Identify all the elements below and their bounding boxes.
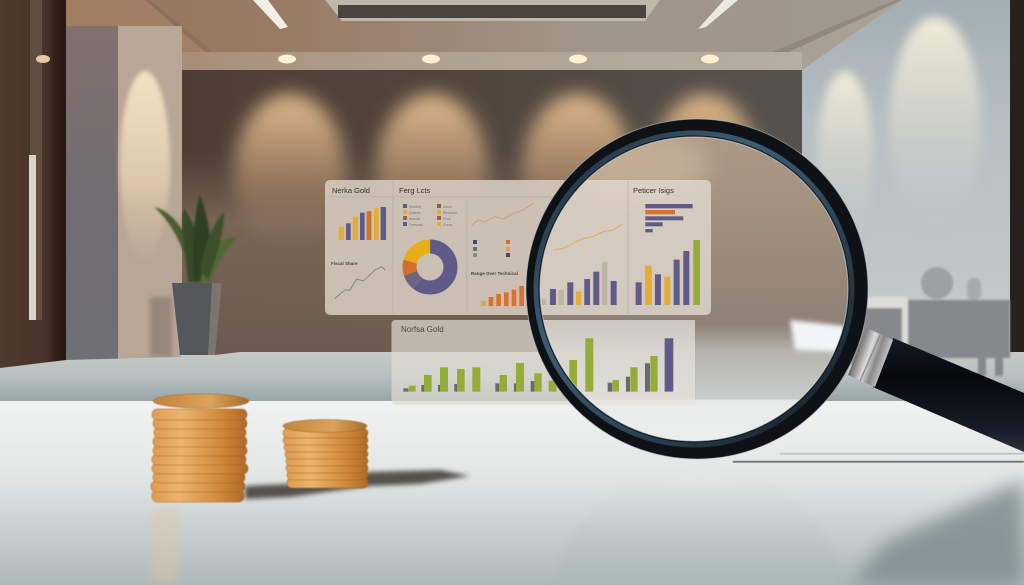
lens heading: Peticer Isigs (633, 186, 674, 195)
donut legend (403, 204, 457, 227)
donut chart (410, 246, 450, 288)
panel headings (332, 186, 674, 195)
donut legend: Price (443, 217, 451, 221)
bar chart: orange (471, 271, 524, 306)
coin shadow (245, 470, 470, 499)
line chart: trend: Fiscal Share (331, 261, 358, 266)
panel headings: Ferg Lcts (399, 186, 431, 195)
ceiling (0, 0, 1024, 72)
floor (0, 352, 1024, 402)
right wall (802, 0, 1024, 375)
magnifier handle (848, 328, 1024, 452)
lens bar chart: purple and gold (542, 240, 700, 305)
line chart: trend (331, 261, 385, 298)
side console and sphere (784, 267, 1010, 376)
panel headings: Peticer Isigs (633, 186, 674, 195)
donut legend: Revenue (443, 211, 457, 215)
bar chart: orange: Range Over Technical (471, 271, 518, 276)
coin stack: small (283, 420, 368, 488)
magnifier rim (526, 119, 868, 459)
dashboard panel: upper (325, 180, 711, 315)
line chart: orange trend (472, 203, 533, 225)
donut legend: Monthly (409, 205, 422, 209)
coin stack: large (151, 394, 249, 502)
left wall and glass door (0, 0, 182, 368)
bar chart: gold and purple (339, 207, 386, 240)
magnifier lens view (540, 137, 848, 410)
panel headings: Nerka Gold (332, 186, 370, 195)
lens line chart (553, 224, 622, 250)
back wall with spotlights (182, 70, 802, 355)
lens panel background (530, 180, 711, 315)
donut legend: Asset (443, 205, 452, 209)
lens horizontal bars (645, 204, 693, 232)
dashboard panel: lower (392, 320, 695, 405)
donut legend: Forecast (409, 223, 423, 227)
legend: middle (473, 240, 510, 257)
donut legend: Annual (409, 217, 420, 221)
potted plant (154, 195, 238, 355)
lower panel heading: Norfsa Gold (401, 325, 444, 334)
donut legend: Gross (443, 223, 453, 227)
donut legend: Quarter (409, 211, 422, 215)
bar chart: green (403, 363, 557, 392)
table surface (0, 401, 1024, 585)
table reflections (152, 453, 1024, 585)
lens lower bars (569, 338, 674, 392)
